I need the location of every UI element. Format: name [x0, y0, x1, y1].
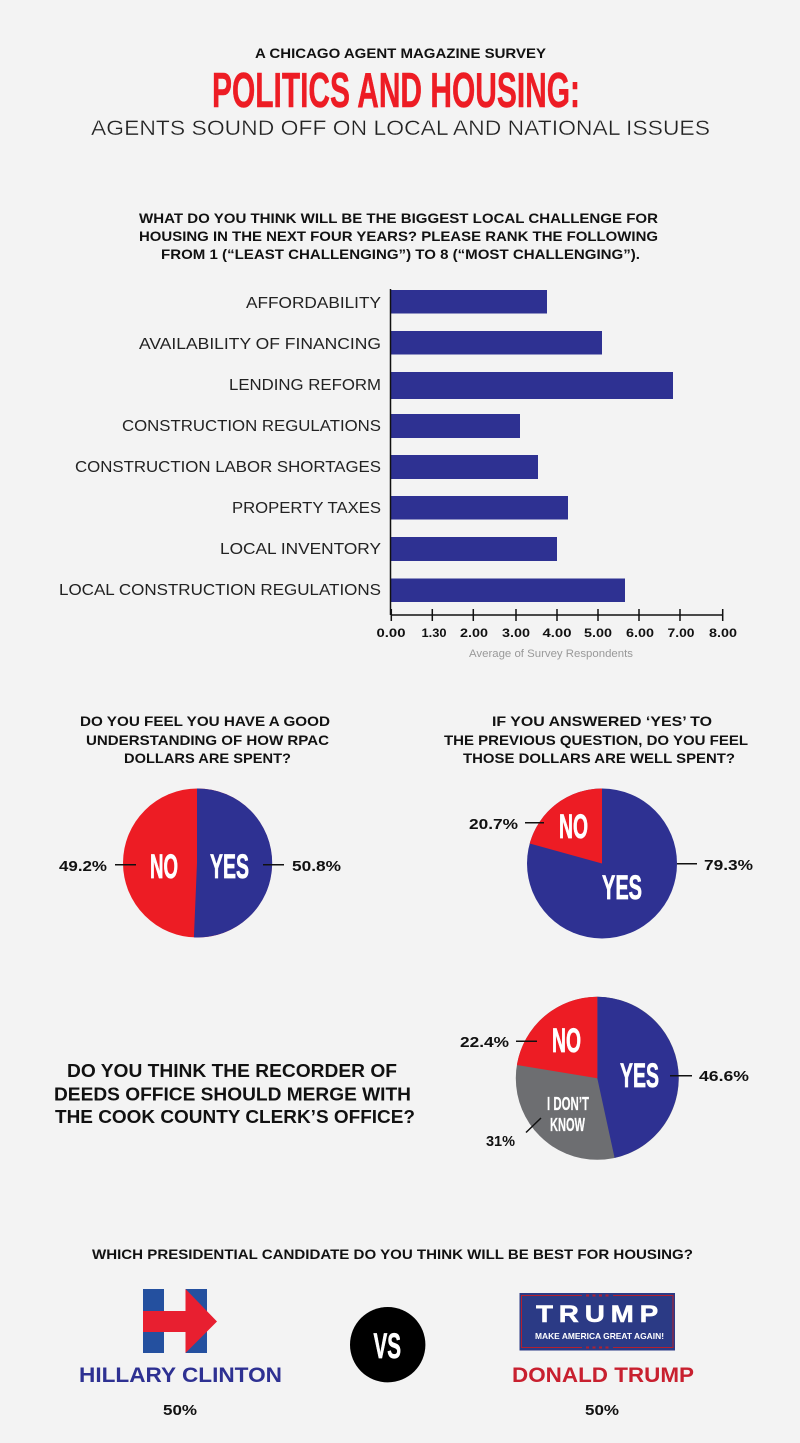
question: THE COOK COUNTY CLERK’S OFFICE? [55, 1107, 415, 1127]
pie chart: YES [210, 848, 249, 886]
question: biggest local challenge: FROM 1 (“LEAST CHALLENGING”) TO 8 (“MOST CHALLENGING”). [161, 246, 640, 262]
axis tick labels: 2.00 [460, 628, 488, 640]
axis tick labels: 4.00 [542, 628, 572, 640]
pie chart [516, 997, 679, 1160]
question: DO YOU FEEL YOU HAVE A GOOD [80, 713, 330, 729]
title: POLITICS AND HOUSING: [212, 64, 580, 118]
icon: trump sign: MAKE AMERICA GREAT AGAIN! [535, 1331, 664, 1341]
panel: dollars well spent [444, 713, 753, 938]
category labels: CONSTRUCTION REGULATIONS [122, 418, 381, 435]
callout: yes [677, 857, 753, 874]
pie chart: NO [150, 848, 178, 886]
category labels: LOCAL INVENTORY [220, 541, 381, 558]
question: biggest local challenge: HOUSING IN THE NEXT FOUR YEARS? PLEASE RANK THE FOLLOWING [139, 228, 658, 244]
pie chart: YES [602, 869, 642, 907]
callout: no [460, 1034, 537, 1051]
axis title: Average of Survey Respondents [469, 648, 634, 660]
pie chart: I DON’T [547, 1094, 589, 1114]
callout: yes: 79.3% [704, 857, 753, 874]
question: DOLLARS ARE SPENT? [124, 750, 291, 766]
question: THE PREVIOUS QUESTION, DO YOU FEEL [444, 732, 748, 748]
callout: yes [670, 1068, 749, 1085]
category labels: CONSTRUCTION LABOR SHORTAGES [75, 459, 381, 476]
heading: presidential candidate: WHICH PRESIDENTIAL CANDIDATE DO YOU THINK WILL BE BEST FOR HOUSING? [92, 1246, 693, 1262]
axis tick labels: 8.00 [709, 628, 737, 640]
callout: no [469, 816, 544, 833]
callout: no [59, 858, 136, 875]
axis tick labels: 7.00 [668, 628, 694, 640]
question [444, 713, 748, 766]
callout: no: 20.7% [469, 816, 518, 833]
subtitle: AGENTS SOUND OFF ON LOCAL AND NATIONAL ISSUES [91, 117, 710, 140]
callout: yes [263, 858, 341, 875]
name: DONALD TRUMP [512, 1364, 694, 1387]
name: HILLARY CLINTON [79, 1364, 282, 1387]
axis tick labels: 0.00 [376, 628, 406, 640]
pie chart [527, 788, 677, 938]
question: UNDERSTANDING OF HOW RPAC [86, 732, 329, 748]
question [80, 713, 330, 766]
question: IF YOU ANSWERED ‘YES’ TO [492, 713, 712, 729]
question: DEEDS OFFICE SHOULD MERGE WITH [54, 1084, 411, 1104]
question: DO YOU THINK THE RECORDER OF [67, 1061, 397, 1081]
question: biggest local challenge: WHAT DO YOU THINK WILL BE THE BIGGEST LOCAL CHALLENGE FOR [139, 210, 658, 226]
callout: i don't know [486, 1118, 541, 1150]
axes [390, 289, 723, 621]
header [91, 45, 710, 140]
axis tick labels [376, 628, 737, 640]
panel: trump [512, 1293, 694, 1419]
pie chart [123, 788, 272, 938]
icon: versus badge [350, 1307, 425, 1382]
kicker: A CHICAGO AGENT MAGAZINE SURVEY [255, 45, 547, 61]
callout: yes: 46.6% [699, 1068, 749, 1085]
category labels: LOCAL CONSTRUCTION REGULATIONS [59, 582, 381, 599]
category labels: PROPERTY TAXES [232, 500, 381, 517]
category labels: AFFORDABILITY [246, 295, 381, 312]
callout: i don't know: 31% [486, 1133, 515, 1150]
callout: no: 22.4% [460, 1034, 509, 1051]
question: biggest local challenge [139, 210, 658, 262]
pie chart: YES [620, 1057, 659, 1095]
icon: hillary logo [143, 1289, 217, 1353]
icon: trump sign [520, 1293, 675, 1350]
pie chart: NO [559, 808, 588, 846]
category labels [59, 295, 381, 599]
axis tick labels: 5.00 [584, 628, 612, 640]
panel: recorder of deeds merge [54, 997, 749, 1160]
question [54, 1061, 415, 1127]
pie chart: KNOW [550, 1115, 585, 1135]
percent: 50% [163, 1402, 197, 1419]
panel: RPAC understanding [59, 713, 341, 938]
category labels: AVAILABILITY OF FINANCING [139, 336, 381, 353]
percent: 50% [585, 1402, 619, 1419]
axis tick labels: 3.00 [502, 628, 530, 640]
bars [391, 290, 673, 602]
question: THOSE DOLLARS ARE WELL SPENT? [463, 750, 735, 766]
axis tick labels: 1.30 [422, 628, 446, 640]
icon: versus badge: VS [374, 1327, 401, 1366]
callout: no: 49.2% [59, 858, 107, 875]
pie chart: NO [552, 1022, 581, 1060]
callout: yes: 50.8% [292, 858, 341, 875]
icon: trump sign: TRUMP [536, 1301, 664, 1328]
bar chart [59, 289, 737, 660]
panel: clinton [79, 1289, 282, 1419]
axis tick labels: 6.00 [626, 628, 654, 640]
category labels: LENDING REFORM [229, 377, 381, 394]
